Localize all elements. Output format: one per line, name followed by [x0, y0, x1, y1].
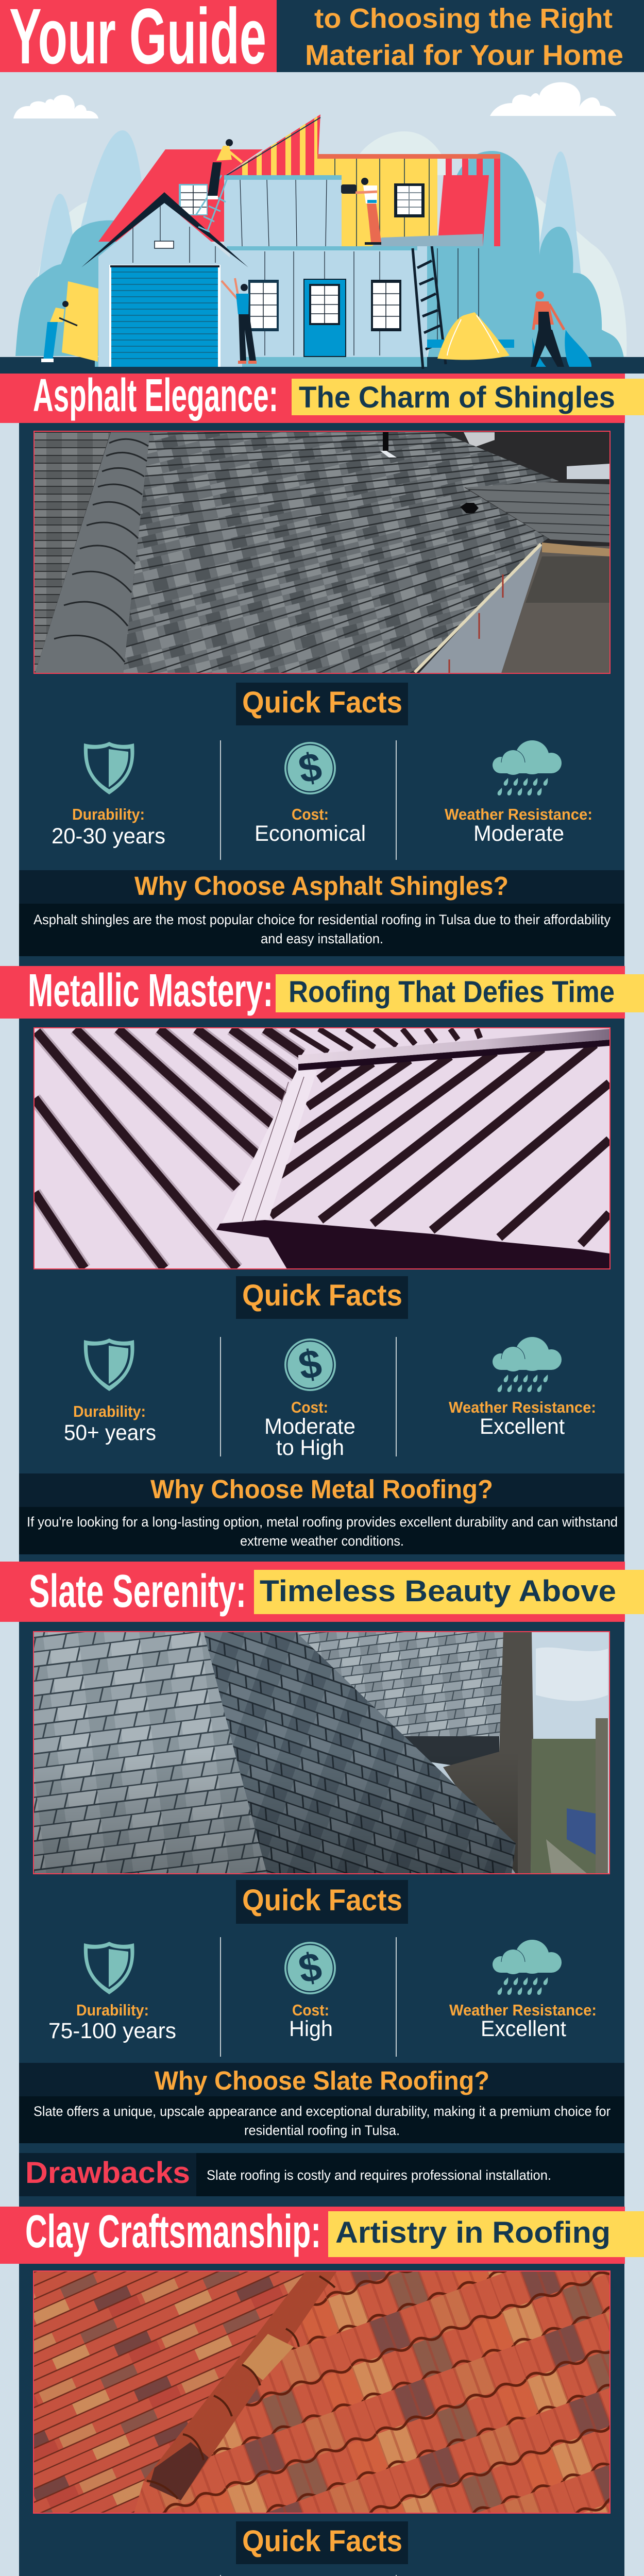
drawbacks block: Slate roofing is costly and requires professional installation. [207, 2167, 551, 2183]
section: clay roofing [0, 2206, 644, 2576]
fact: durability: Durability: [76, 2001, 149, 2019]
fact: weather: Weather Resistance: [445, 805, 592, 823]
icon: coin: $ [295, 1340, 325, 1388]
icon: coin: $ [295, 743, 325, 792]
icon: coin [284, 1338, 336, 1391]
why choose block: Why Choose Slate Roofing? [155, 2066, 489, 2095]
dividers [221, 740, 396, 860]
section: slate roofing [0, 1562, 644, 2196]
upper box [224, 175, 342, 246]
fact: cost: Cost: [292, 2001, 329, 2019]
photo: standing seam metal roof [34, 1028, 610, 1269]
why choose block: Why Choose Metal Roofing? [150, 1475, 493, 1504]
why choose block: If you're looking for a long-lasting option, metal roofing provides excellent durability and can withstand [27, 1514, 618, 1530]
sand pile [427, 312, 514, 360]
red roof and striped gable [98, 114, 320, 242]
icon: rain cloud [493, 1337, 562, 1392]
photo: asphalt shingle roof [34, 426, 610, 673]
fact: cost: to High [276, 1435, 344, 1460]
lower windows and door [248, 279, 401, 357]
photo border [34, 431, 610, 673]
drawbacks block [19, 2153, 624, 2196]
section: metal roofing [0, 965, 644, 1554]
fact: cost [289, 2001, 333, 2041]
icon: shield [84, 1942, 134, 1994]
fact: weather [449, 1398, 596, 1439]
photo border [34, 1028, 610, 1269]
black ladder [413, 241, 446, 369]
heading band: Metallic Mastery: [28, 965, 273, 1016]
drawbacks block: Drawbacks [25, 2156, 190, 2190]
ground [0, 357, 644, 374]
heading band [0, 965, 644, 1019]
heading band: Timeless Beauty Above [260, 1574, 616, 1608]
fact: durability: 20-30 years [52, 824, 165, 849]
fact: cost: Moderate [264, 1414, 355, 1439]
heading band [0, 1562, 644, 1622]
icon: shield [84, 742, 134, 794]
subtitle line 1: to Choosing the Right [314, 3, 613, 34]
icon: coin [284, 742, 336, 794]
cloud left [13, 95, 98, 118]
fact: weather: Excellent [480, 1414, 565, 1439]
why choose block [19, 1473, 624, 1554]
yellow wall [317, 154, 500, 246]
icon: rain cloud [493, 1940, 562, 1995]
icon: shield [84, 1338, 134, 1391]
header banner [0, 0, 644, 80]
fact: durability: Durability: [73, 1402, 146, 1420]
photo border [33, 2271, 610, 2513]
heading band [0, 370, 644, 423]
heading band [0, 2206, 644, 2264]
fact: weather: Excellent [481, 2016, 566, 2041]
main navy panel [19, 423, 624, 2576]
worker at boards [41, 301, 77, 362]
quick facts heading: Quick Facts [242, 1884, 402, 1917]
fact: weather: Weather Resistance: [449, 2001, 597, 2019]
photo border [33, 1632, 609, 1874]
subtitle line 2: Material for Your Home [305, 39, 623, 71]
fact: cost: Cost: [291, 1398, 328, 1416]
quick facts heading: Quick Facts [242, 2524, 402, 2558]
heading band: Artistry in Roofing [335, 2216, 611, 2249]
photo: clay tile roof [33, 2271, 610, 2513]
fact: weather [449, 2001, 597, 2041]
teal ladder [196, 175, 228, 232]
section: asphalt shingles [0, 370, 644, 956]
garage door [109, 265, 221, 367]
worker with drill [341, 178, 381, 245]
fact: durability: 75-100 years [48, 2019, 176, 2043]
why choose block: Asphalt shingles are the most popular choice for residential roofing in Tulsa due to their affordability [33, 912, 611, 927]
why choose block: and easy installation. [261, 931, 383, 946]
icon: coin: $ [295, 1943, 325, 1992]
fact: cost [264, 1398, 355, 1460]
lower box [95, 246, 503, 367]
fact: weather [445, 805, 592, 846]
dividers [221, 1337, 396, 1456]
why choose block [19, 2063, 624, 2143]
gable house [81, 192, 248, 367]
fact: durability [52, 805, 165, 849]
heading band: Slate Serenity: [29, 1566, 246, 1617]
heading band: Asphalt Elegance: [33, 370, 278, 421]
yellow boards [62, 281, 98, 362]
fact: cost: Cost: [292, 805, 329, 823]
dividers [221, 1937, 396, 2057]
heading band: Roofing That Defies Time [289, 975, 615, 1009]
worker on ladder top [208, 139, 242, 199]
worker with bags [531, 291, 591, 367]
fact: durability: 50+ years [64, 1420, 156, 1445]
heading band: Clay Craftsmanship: [25, 2206, 321, 2258]
heading band: The Charm of Shingles [299, 381, 615, 414]
quick facts heading: Quick Facts [242, 1279, 402, 1312]
window on red roof [179, 184, 208, 215]
fact: cost: High [289, 2016, 333, 2041]
photo: slate roof [33, 1632, 609, 1874]
fact: weather: Weather Resistance: [449, 1398, 596, 1416]
planks pile [372, 234, 483, 246]
fact: cost [255, 805, 366, 846]
icon: coin [284, 1942, 336, 1994]
why choose block: Slate offers a unique, upscale appearance and exceptional durability, making it a premium choice for [33, 2104, 611, 2119]
icon: rain cloud [493, 740, 562, 795]
why choose block: extreme weather conditions. [240, 1533, 404, 1549]
cloud right [490, 82, 616, 116]
illustration: house under construction [0, 82, 644, 374]
fact: cost: Economical [255, 821, 366, 846]
dividers [221, 2575, 396, 2576]
fact: durability: Durability: [72, 805, 145, 823]
worker with hammer [222, 278, 257, 364]
fact: weather: Moderate [473, 821, 564, 846]
why choose block [19, 870, 624, 956]
quick facts heading: Quick Facts [242, 686, 402, 719]
why choose block: Why Choose Asphalt Shingles? [134, 871, 509, 901]
why choose block: residential roofing in Tulsa. [244, 2123, 400, 2138]
fact: durability [48, 2001, 176, 2043]
background hills [15, 130, 626, 361]
fact: durability [64, 1402, 156, 1445]
